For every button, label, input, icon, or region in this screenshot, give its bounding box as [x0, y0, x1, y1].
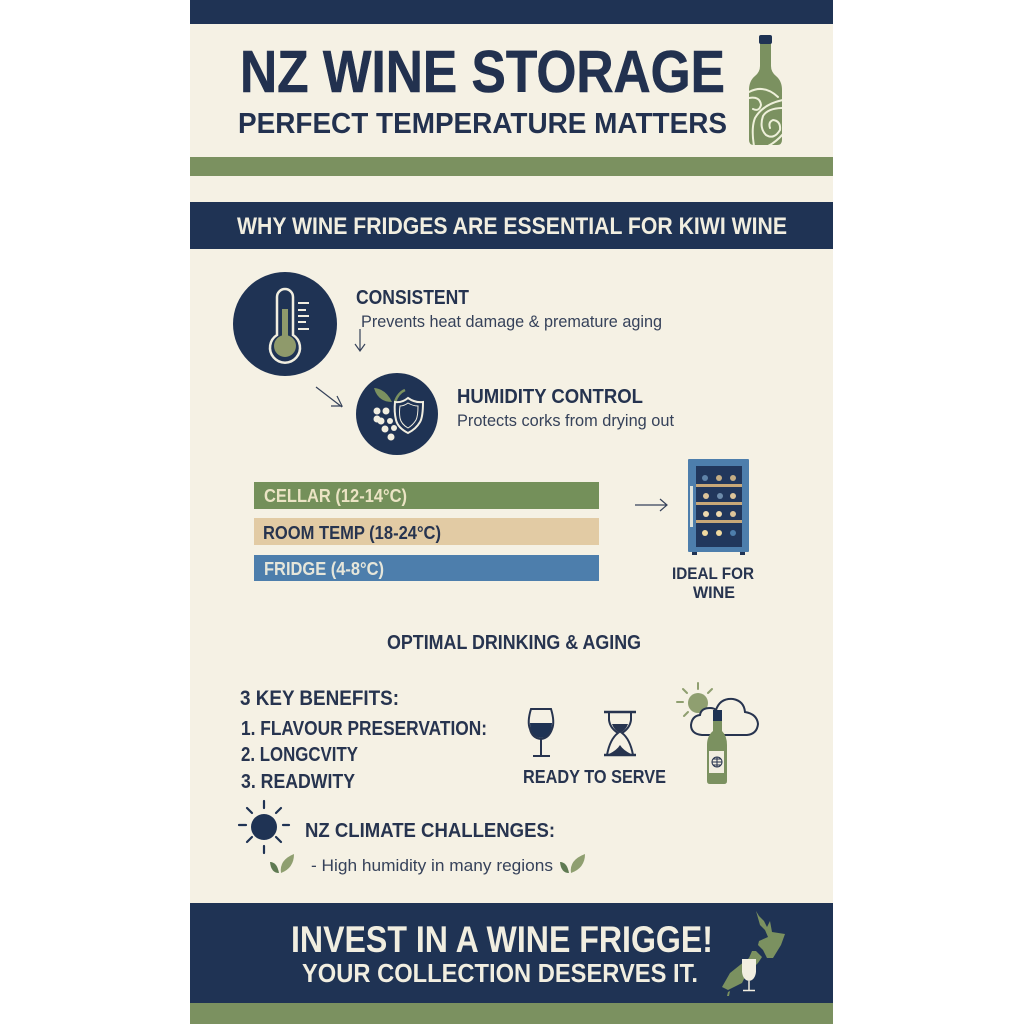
arrow: to wine fridge [635, 499, 667, 511]
icon: wine glass [529, 709, 553, 756]
title: NZ WINE STORAGE [240, 39, 725, 105]
icon: leaf right [560, 854, 585, 873]
bar: fridge: FRIDGE (4-8°C) [264, 559, 384, 579]
section heading band [190, 202, 833, 249]
subtitle: PERFECT TEMPERATURE MATTERS [238, 108, 727, 140]
icon: leaf left [270, 854, 294, 873]
icon: sun, cloud and bottle [677, 683, 758, 784]
icon: NZ map with wine glass [722, 911, 785, 996]
bar: room temperature: ROOM TEMP (18-24°C) [263, 523, 441, 543]
icon: grapes and shield [356, 373, 438, 455]
heading: humidity control: HUMIDITY CONTROL [457, 386, 643, 408]
divider band: bottom green [190, 1003, 833, 1024]
label: ideal for wine: WINE [693, 583, 735, 602]
text: invest in a wine fridge: INVEST IN A WINE FRIGGE! [291, 919, 713, 960]
bar: cellar [254, 482, 599, 509]
bar: room temperature [254, 518, 599, 545]
panel: header [190, 0, 833, 176]
icon: wine fridge [688, 459, 749, 555]
heading: 3 key benefits: 3 KEY BENEFITS: [240, 687, 399, 710]
panel: call to action footer [190, 903, 833, 1024]
panel: humidity control [356, 373, 674, 455]
bar: cellar: CELLAR (12-14°C) [264, 486, 407, 506]
arrow: down [355, 329, 365, 351]
divider band: green [190, 157, 833, 176]
chart: temperature bars [254, 482, 599, 581]
text: your collection deserves it: YOUR COLLECTION DESERVES IT. [302, 958, 698, 988]
heading: consistent: CONSISTENT [356, 287, 469, 309]
heading: optimal drinking and aging: OPTIMAL DRINKING & AGING [387, 632, 641, 654]
section heading band: WHY WINE FRIDGES ARE ESSENTIAL FOR KIWI WINE [237, 213, 787, 240]
icon: thermometer [233, 272, 337, 376]
panel: key benefits list [240, 687, 487, 793]
panel: NZ climate challenges [239, 801, 585, 875]
label: ideal for wine: IDEAL FOR [672, 564, 754, 583]
heading: NZ climate challenges: NZ CLIMATE CHALLENGES: [305, 820, 555, 842]
label: ideal for wine [672, 564, 754, 602]
text: high humidity: - High humidity in many regions [311, 856, 553, 875]
icon: hourglass [604, 712, 636, 755]
list item 2: 2. LONGCVITY [241, 744, 359, 766]
text: protects corks: Protects corks from drying out [457, 411, 674, 430]
bar: fridge [254, 555, 599, 581]
panel: ready to serve [523, 709, 666, 787]
text: prevents heat damage: Prevents heat damage & premature aging [361, 312, 662, 331]
icon: green wine bottle with koru pattern [749, 35, 783, 146]
icon: sun [239, 801, 289, 853]
label: ready to serve: READY TO SERVE [523, 767, 666, 787]
list item 3: 3. READWITY [241, 771, 356, 793]
panel: consistent temperature [233, 272, 662, 376]
list item 1: 1. FLAVOUR PRESERVATION: [241, 718, 487, 740]
arrow: diagonal to humidity [316, 387, 342, 407]
